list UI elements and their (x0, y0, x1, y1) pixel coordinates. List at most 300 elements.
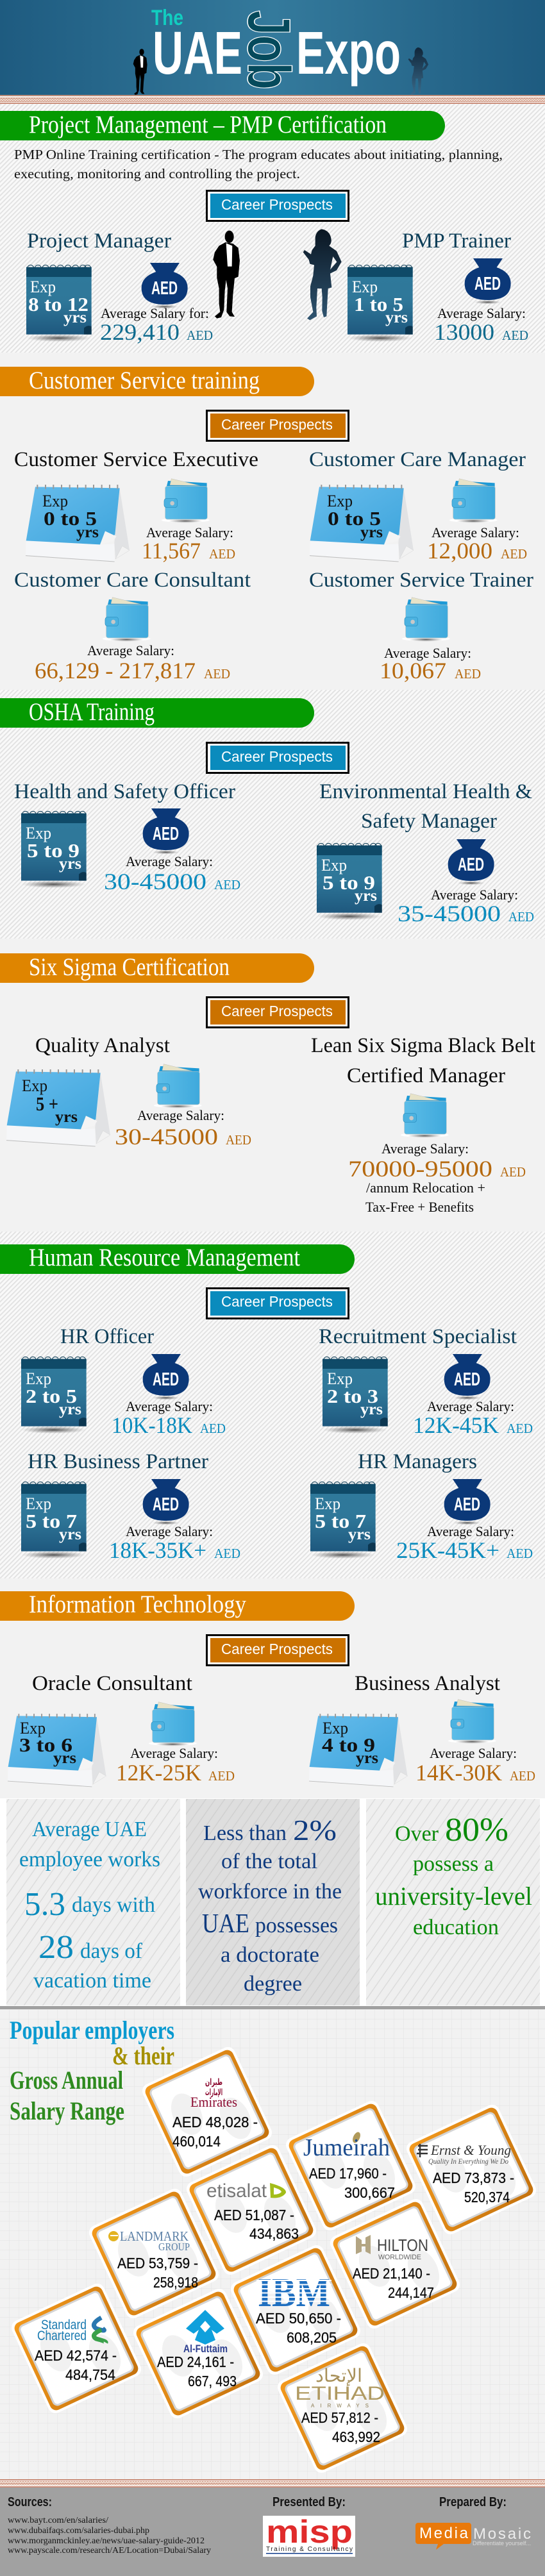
card: Jumeirah: AED 17,960 - (309, 2165, 387, 2182)
salary: AED (187, 328, 213, 343)
card: Ernst and Young (404, 2102, 539, 2237)
salary: Average Salary: (431, 887, 518, 903)
logo: Media Mosaic (415, 2523, 531, 2550)
salary: 13000 (434, 319, 494, 345)
sources: Sources: (8, 2495, 52, 2509)
career prospects button: Career Prospects (221, 1641, 333, 1657)
icon: wallet (402, 598, 450, 642)
heading: popular employers: Gross Annual (10, 2066, 123, 2095)
icon: notepad experience (323, 1357, 388, 1434)
icon: notepad experience: Exp (30, 278, 56, 296)
icon: money bag: AED (454, 1369, 480, 1390)
salary (115, 1107, 251, 1150)
role: Environmental Health and Safety Manager: Safety Manager (361, 810, 497, 833)
panel: doctorate stat (186, 1799, 360, 2005)
card: Landmark: 258,918 (153, 2274, 198, 2291)
career prospects button: Career Prospects (221, 196, 333, 213)
description (14, 147, 503, 181)
role: Quality Analyst (6, 1034, 251, 1150)
icon: money bag (444, 1479, 491, 1525)
icon: money bag: AED (153, 1369, 179, 1390)
role: Lean Six Sigma Black Belt Certified Manager: Certified Manager (347, 1064, 505, 1087)
role: Health and Safety Officer (14, 780, 240, 894)
icon: notepad experience: yrs (59, 1401, 81, 1418)
icon: desk calendar: 0 to 5 (328, 507, 381, 530)
card: Emirates (140, 2045, 274, 2179)
icon: notepad experience (317, 843, 382, 920)
salary: AED (502, 328, 528, 343)
salary (396, 1523, 533, 1563)
icon: money bag: AED (153, 824, 179, 844)
icon: desk calendar (309, 1714, 408, 1787)
salary: Average Salary: (384, 645, 471, 661)
icon: notepad experience (21, 1357, 87, 1434)
role: Customer Care Consultant: Customer Care Consultant (14, 569, 251, 592)
icon: desk calendar: 5 + (36, 1092, 58, 1115)
icon: notepad experience: 2 to 5 (26, 1385, 77, 1407)
icon: wallet (162, 479, 210, 523)
card: Standard Chartered: AED 42,574 - (35, 2347, 117, 2364)
title: The: The (151, 6, 183, 30)
career prospects button (206, 1287, 349, 1319)
title: Job rotated: Job (235, 10, 303, 90)
icon: notepad experience: yrs (360, 1401, 383, 1418)
salary: Average Salary: (146, 524, 233, 540)
card: Etihad: الإتحاد (315, 2365, 362, 2386)
card: Ernst and Young: 520,374 (464, 2189, 510, 2205)
icon: notepad experience: 2 to 3 (327, 1385, 378, 1407)
card: IBM: 608,205 (287, 2329, 337, 2346)
icon: notepad experience: Exp (352, 278, 378, 296)
role: Customer Service Executive (14, 448, 258, 564)
icon: notepad experience (21, 811, 87, 888)
icon: wallet (149, 1702, 197, 1746)
salary: Average Salary: (130, 1745, 218, 1761)
role: HR Managers (310, 1450, 533, 1563)
panel: working days stat: employee works (19, 1848, 160, 1871)
salary: AED (508, 909, 534, 924)
card: Landmark: LANDMARK (120, 2229, 189, 2244)
icon: notepad experience: 5 to 7 (315, 1510, 366, 1532)
role: Health and Safety Officer: Health and Safety Officer (14, 780, 235, 803)
icon: notepad experience (310, 1482, 376, 1559)
icon: desk calendar (8, 1714, 106, 1787)
icon: notepad experience: Exp (315, 1494, 340, 1513)
card: Standard Chartered (9, 2281, 144, 2416)
card: Jumeirah: Jumeirah (303, 2134, 390, 2161)
panel: working days stat (6, 1799, 180, 2005)
salary: AED (214, 1546, 240, 1561)
icon: notepad experience (348, 265, 413, 342)
role: Customer Care Consultant (14, 569, 251, 683)
prepared by: Prepared By: (439, 2495, 507, 2509)
icon: notepad experience: 5 to 7 (26, 1510, 77, 1532)
role: Customer Service Trainer: Customer Service Trainer (309, 569, 533, 592)
salary (109, 1523, 240, 1563)
role: HR Business Partner (21, 1450, 240, 1563)
pattern strip (0, 2479, 545, 2488)
career prospects button: Career Prospects (221, 1293, 333, 1310)
panel: doctorate stat: a doctorate (221, 1943, 319, 1967)
footer (0, 2488, 545, 2576)
role: Recruitment Specialist: Recruitment Specialist (319, 1325, 517, 1348)
panel: project management (0, 104, 545, 353)
salary: 14K-30K (415, 1760, 502, 1786)
icon: wallet (401, 1094, 449, 1138)
salary: 35-45000 (398, 901, 501, 926)
heading: Human Resource Management: Human Resource Management (29, 1244, 300, 1271)
pattern strip (0, 95, 545, 104)
salary (142, 524, 235, 564)
heading: Customer Service training: Customer Service training (29, 367, 260, 394)
icon: notepad experience: Exp (26, 824, 51, 842)
panel: popular employers (0, 2006, 545, 2480)
salary (434, 305, 528, 345)
header banner (0, 0, 545, 95)
card: Al-Futtaim: AED 24,161 - (157, 2354, 234, 2370)
panel: doctorate stat: possesses (255, 1914, 338, 1937)
panel: university stat: possess a (413, 1852, 494, 1876)
logo: Media Mosaic: Mosaic (473, 2525, 531, 2543)
heading: popular employers: & their (112, 2041, 174, 2070)
presented by: Presented By: (272, 2495, 346, 2509)
salary (348, 1141, 526, 1215)
sources: www.morganmckinley.ae/news/uae-salary-guide-2012 (8, 2536, 205, 2546)
sources: www.bayt.com/en/salaries/ (8, 2516, 108, 2525)
salary (413, 1398, 533, 1438)
card: Standard Chartered: 484,754 (65, 2366, 115, 2383)
icon: notepad experience: yrs (59, 855, 81, 873)
card: Emirates: Emirates (190, 2094, 237, 2110)
salary (380, 645, 481, 683)
salary: AED (500, 1164, 526, 1180)
panel: university stat: education (413, 1916, 499, 1939)
panel: six sigma certification (0, 939, 545, 1232)
icon: wallet (103, 598, 151, 642)
salary: AED (200, 1421, 226, 1436)
card: Hilton: AED 21,140 - (353, 2265, 430, 2282)
icon: money bag (142, 263, 188, 308)
icon: desk calendar: yrs (360, 524, 383, 541)
role: HR Officer (21, 1325, 226, 1438)
salary: /annum Relocation + (366, 1180, 485, 1196)
icon: desk calendar (6, 1069, 110, 1146)
panel: human resource management (0, 1232, 545, 1578)
salary (104, 853, 240, 894)
card: Al-Futtaim: Al-Futtaim (183, 2343, 228, 2355)
heading: popular employers (10, 2016, 174, 2125)
heading: Information Technology: Information Technology (29, 1591, 246, 1618)
career prospects button (206, 190, 349, 222)
salary: 10K-18K (112, 1412, 192, 1438)
role: PMP Trainer: PMP Trainer (402, 230, 511, 253)
panel: university stat: university-level (375, 1882, 532, 1911)
icon: money bag (465, 258, 511, 304)
icon: money bag (444, 1354, 491, 1400)
role: Lean Six Sigma Black Belt Certified Manager: Lean Six Sigma Black Belt (311, 1034, 535, 1057)
salary (100, 305, 213, 345)
title: UAE: UAE (153, 19, 242, 87)
icon: desk calendar: 4 to 9 (322, 1734, 375, 1756)
card: Al-Futtaim (131, 2286, 265, 2421)
icon: money bag: AED (151, 278, 178, 299)
salary: 10,067 (380, 658, 446, 683)
salary: AED (507, 1421, 533, 1436)
card: Hilton: WORLDWIDE (378, 2254, 421, 2261)
heading: popular employers: Popular employers (10, 2016, 174, 2045)
heading: OSHA Training (0, 698, 314, 728)
panel: information technology (0, 1578, 545, 1798)
salary: Average Salary: (87, 642, 174, 658)
icon: money bag: AED (454, 1494, 480, 1515)
panel: working days stat: 5.3 (24, 1886, 65, 1923)
role: Oracle Consultant: Oracle Consultant (32, 1672, 192, 1695)
card: Landmark: AED 53,759 - (117, 2255, 198, 2271)
card: Ernst and Young: Ernst & Young (430, 2142, 511, 2158)
card: Ernst and Young: Quality In Everything We Do (428, 2157, 508, 2166)
panel: customer service training (0, 353, 545, 690)
icon: money bag (143, 1479, 189, 1525)
logo: Media Mosaic: Differentiate yourself... (473, 2540, 531, 2547)
card: Emirates: 460,014 (172, 2133, 221, 2150)
salary: 18K-35K+ (109, 1537, 206, 1563)
icon: notepad experience (26, 265, 92, 342)
description: PMP Online Training certification - The program educates about initiating, planning, (14, 147, 503, 162)
salary: 229,410 (100, 319, 180, 345)
prepared by (415, 2495, 531, 2550)
role: HR Managers: HR Managers (358, 1450, 477, 1473)
role: Customer Care Manager: Customer Care Manager (309, 448, 526, 471)
salary: 12K-45K (413, 1412, 499, 1438)
card: Etihad: ETIHAD (295, 2383, 385, 2404)
salary (398, 887, 534, 926)
career prospects button: Career Prospects (221, 416, 333, 433)
career prospects button: Career Prospects (221, 1003, 333, 1019)
salary: Average Salary: (437, 305, 526, 321)
card: Etisalat (184, 2143, 319, 2277)
icon: notepad experience: 8 to 12 (28, 293, 88, 315)
career prospects button (206, 742, 349, 774)
role: Business Analyst: Business Analyst (355, 1672, 500, 1695)
panel: working days stat: days of (80, 1939, 143, 1963)
card: Standard Chartered: Standard (41, 2318, 87, 2332)
salary (35, 642, 230, 683)
salary: Average Salary for: (101, 305, 209, 321)
sources: www.dubaifaqs.com/salaries-dubai.php (8, 2526, 149, 2536)
logo: MISP: Training & Consultancy (266, 2546, 353, 2553)
icon: desk calendar: yrs (76, 524, 99, 541)
panel: working days stat: days with (72, 1893, 155, 1917)
icon: notepad experience: Exp (327, 1369, 353, 1388)
role: HR Business Partner: HR Business Partner (28, 1450, 208, 1473)
icon: notepad experience: yrs (59, 1526, 81, 1543)
icon: notepad experience: 5 to 9 (323, 871, 375, 894)
salary: Average Salary: (430, 1745, 517, 1761)
icon: money bag (143, 808, 189, 854)
salary: Average Salary: (432, 524, 519, 540)
icon: wallet (449, 479, 498, 523)
role: PMP Trainer (348, 230, 528, 345)
icon: notepad experience: 1 to 5 (354, 293, 403, 315)
salary: AED (226, 1132, 251, 1148)
role: Business Analyst (309, 1672, 535, 1787)
role: Customer Service Trainer (309, 569, 533, 683)
card: Landmark (87, 2186, 221, 2321)
panel: university stat: Over (395, 1822, 439, 1846)
role: Project Manager (26, 230, 213, 345)
role: Environmental Health and Safety Manager: Environmental Health & (319, 780, 532, 803)
salary: AED (214, 877, 240, 892)
logo: MISP (263, 2514, 355, 2557)
salary: 25K-45K+ (396, 1537, 499, 1563)
logo: MISP: misp (266, 2514, 353, 2550)
card: Hilton: 244,147 (388, 2284, 434, 2301)
panel: working days stat: Average UAE (32, 1818, 147, 1841)
icon: desk calendar (310, 485, 414, 562)
card: Hilton (328, 2196, 462, 2331)
icon: desk calendar: 3 to 6 (19, 1734, 72, 1756)
icon: desk calendar (26, 485, 130, 562)
role: Recruitment Specialist (319, 1325, 533, 1438)
panel: doctorate stat: UAE (202, 1909, 249, 1939)
sources: www.payscale.com/research/AE/Location=Dubai/Salary (8, 2546, 211, 2555)
card: Landmark: GROUP (158, 2241, 190, 2253)
icon: wallet (154, 1064, 202, 1108)
icon: desk calendar: yrs (55, 1108, 78, 1126)
card: Ernst and Young: AED 73,873 - (433, 2170, 514, 2186)
salary: 66,129 - 217,817 (35, 658, 196, 683)
salary: 30-45000 (104, 869, 206, 894)
presented by (263, 2495, 355, 2557)
card: IBM: IBM (258, 2270, 330, 2315)
icon: notepad experience: Exp (321, 856, 347, 874)
career prospects button (206, 1634, 349, 1666)
panel: doctorate stat: of the total (221, 1850, 317, 1873)
salary: AED (209, 546, 235, 562)
panel: working days stat: vacation time (33, 1969, 151, 1993)
salary (112, 1398, 226, 1438)
icon: man silhouette (213, 231, 240, 319)
icon: desk calendar: Exp (20, 1719, 46, 1737)
icon: notepad experience (21, 1482, 87, 1559)
icon: notepad experience: Exp (26, 1494, 51, 1513)
salary (116, 1745, 235, 1786)
card: Jumeirah (283, 2098, 418, 2233)
card: Etihad: AED 57,812 - (301, 2409, 378, 2426)
career prospects button (206, 996, 349, 1028)
sources (8, 2495, 211, 2555)
role: Customer Care Manager (309, 448, 527, 564)
heading: Information Technology (0, 1591, 355, 1621)
logo: Media Mosaic: Media (419, 2525, 469, 2542)
salary (427, 524, 527, 564)
card: Emirates: AED 48,028 - (172, 2114, 258, 2130)
salary: 12K-25K (116, 1760, 201, 1786)
salary: Tax-Free + Benefits (365, 1199, 474, 1215)
heading: popular employers: Salary Range (10, 2096, 124, 2125)
panel: doctorate stat: 2% (293, 1814, 337, 1846)
card: Al-Futtaim: 667, 493 (188, 2373, 237, 2389)
salary: AED (501, 546, 527, 562)
role: Customer Service Executive: Customer Service Executive (14, 448, 258, 471)
icon: desk calendar: yrs (356, 1750, 378, 1767)
salary: Average Salary: (427, 1398, 514, 1414)
icon: desk calendar: yrs (53, 1750, 76, 1767)
salary: 30-45000 (115, 1124, 218, 1150)
card: Etisalat: AED 51,087 - (214, 2207, 294, 2223)
salary: 12,000 (427, 538, 492, 564)
panel: doctorate stat: Less than (203, 1821, 287, 1845)
card: IBM (228, 2243, 363, 2377)
icon: man silhouette small (133, 49, 147, 95)
icon: desk calendar: 0 to 5 (44, 507, 97, 530)
icon: notepad experience: yrs (355, 887, 377, 905)
card: Hilton: HILTON (377, 2236, 428, 2255)
icon: notepad experience: Exp (26, 1369, 51, 1388)
salary: AED (208, 1768, 235, 1784)
salary: Average Salary: (382, 1141, 469, 1157)
salary: AED (204, 666, 230, 682)
role: Lean Six Sigma Black Belt Certified Manager (311, 1034, 535, 1215)
role: Oracle Consultant (8, 1672, 235, 1787)
card: Emirates: طيران (205, 2077, 222, 2087)
card: Etisalat: 434,863 (249, 2225, 299, 2242)
salary: Average Salary: (137, 1107, 224, 1123)
card: Etihad: AIRWAYS (311, 2403, 369, 2409)
icon: money bag (143, 1354, 189, 1400)
icon: money bag: AED (458, 855, 484, 875)
icon: woman silhouette small (408, 47, 428, 95)
panel: doctorate stat: workforce in the (198, 1880, 342, 1903)
card: Etihad (275, 2341, 410, 2475)
icon: wallet (448, 1700, 496, 1744)
heading: Six Sigma Certification: Six Sigma Certification (29, 953, 230, 981)
card: Jumeirah: 300,667 (344, 2184, 395, 2201)
card: Etihad: 463,992 (332, 2429, 380, 2445)
icon: notepad experience: yrs (348, 1526, 371, 1543)
icon: money bag (448, 839, 494, 885)
role: HR Officer: HR Officer (60, 1325, 154, 1348)
icon: notepad experience: yrs (385, 309, 408, 326)
salary: 11,567 (142, 538, 201, 564)
description: executing, monitoring and controlling the project. (14, 166, 300, 181)
salary: 70000-95000 (348, 1156, 492, 1182)
icon: money bag: AED (474, 274, 501, 294)
role: Project Manager: Project Manager (27, 230, 171, 253)
icon: notepad experience: 5 to 9 (27, 839, 80, 862)
salary: AED (507, 1546, 533, 1561)
salary: Average Salary: (126, 1523, 213, 1539)
panel: doctorate stat: degree (244, 1972, 302, 1996)
icon: woman silhouette (303, 229, 342, 320)
role: Quality Analyst: Quality Analyst (35, 1034, 170, 1057)
card: Emirates: الإمارات (205, 2087, 222, 2098)
icon: desk calendar: Exp (323, 1719, 348, 1737)
heading: OSHA Training: OSHA Training (29, 698, 155, 726)
salary: AED (455, 666, 481, 682)
salary (415, 1745, 535, 1786)
panel: OSHA training (0, 690, 545, 939)
heading: Project Management: Project Management – PMP Certification (29, 111, 387, 138)
icon: desk calendar: Exp (42, 492, 68, 510)
title: Expo: Expo (296, 19, 401, 87)
panel: working days stat: 28 (38, 1929, 74, 1966)
icon: desk calendar: Exp (327, 492, 353, 510)
card: Etisalat: etisalat (206, 2180, 267, 2202)
panel: university stat: 80% (445, 1812, 508, 1848)
salary: Average Salary: (126, 1398, 213, 1414)
statistics band (0, 1798, 545, 2006)
